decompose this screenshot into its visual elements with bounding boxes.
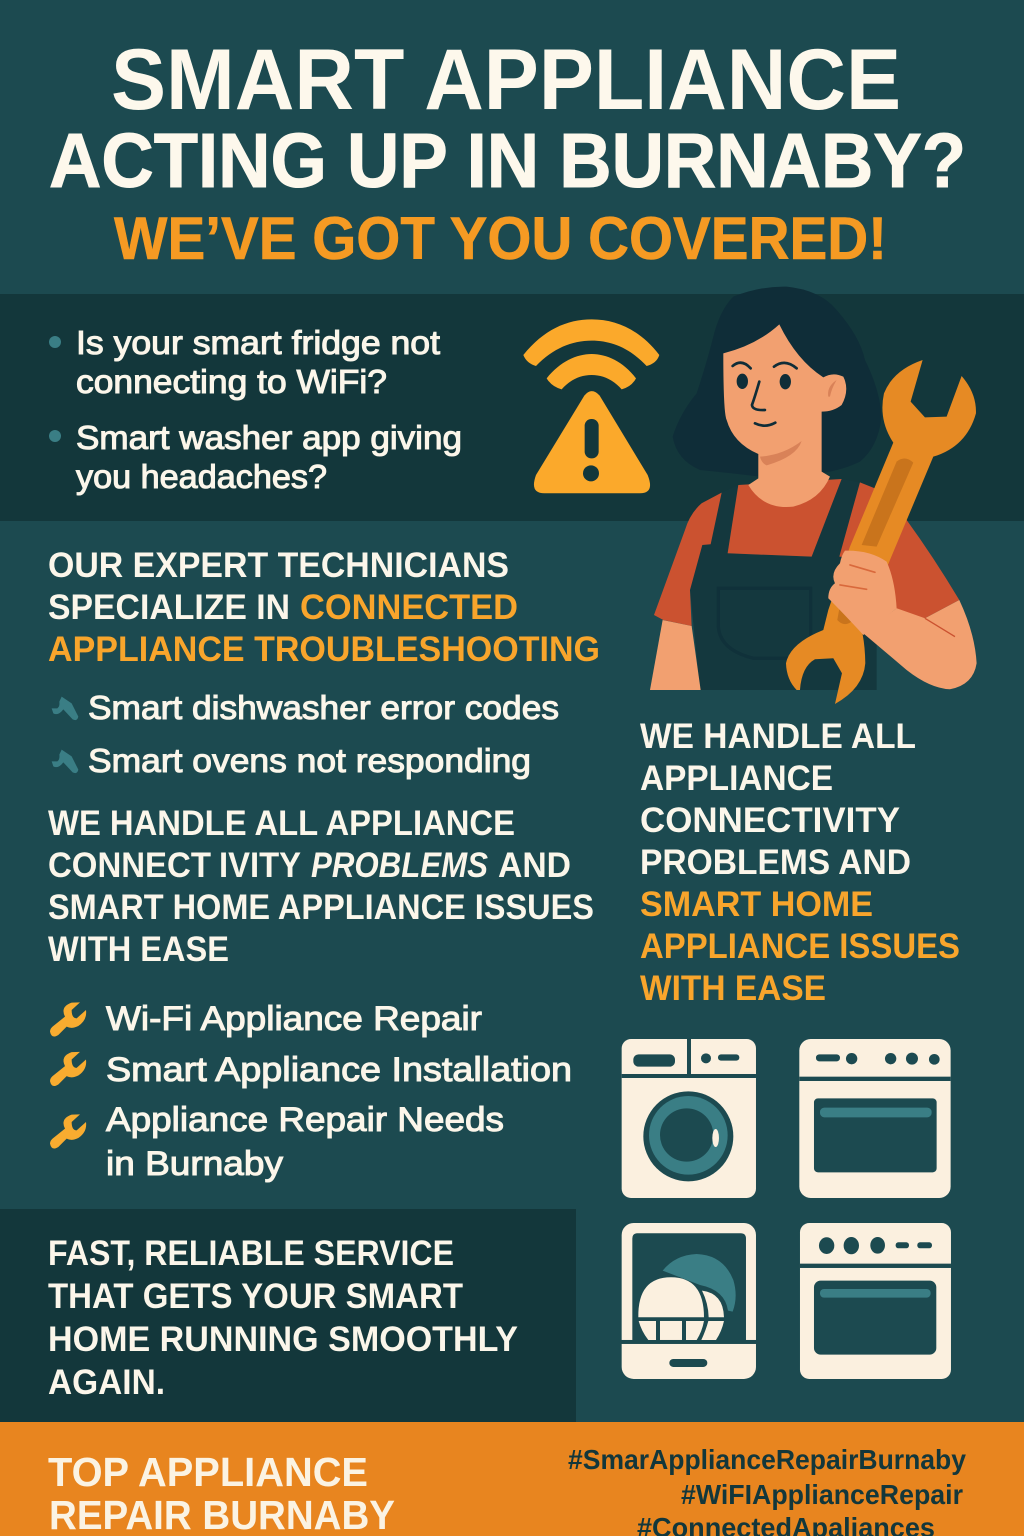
hashtags: #WiFIApplianceRepair <box>681 1479 963 1510</box>
icon: yellow wrench <box>50 1052 86 1086</box>
text block: connectivity problems <box>48 804 594 969</box>
title: SMART APPLIANCE <box>111 32 901 128</box>
icon: dishwasher <box>621 1223 757 1379</box>
text block: right column: SMART HOME <box>640 885 873 924</box>
left arm <box>650 620 701 690</box>
hair <box>673 287 882 477</box>
list: services: Smart Appliance Installation <box>106 1051 572 1089</box>
text block: connectivity problems: AND <box>498 846 571 885</box>
panel: questions list: Is your smart fridge not <box>76 324 440 361</box>
overalls <box>690 479 877 690</box>
right arm <box>863 600 977 689</box>
footer band <box>0 1422 1024 1536</box>
icon: oven <box>800 1223 951 1379</box>
footer heading <box>48 1449 395 1536</box>
hand <box>828 551 897 635</box>
heading: expert technicians <box>48 546 600 669</box>
icon: washing machine <box>622 1039 756 1198</box>
shirt <box>728 479 842 557</box>
list: smart appliance problems: Smart ovens not responding <box>88 742 531 779</box>
heading: expert technicians: SPECIALIZE IN <box>48 588 290 627</box>
icon: range top-left oven <box>799 1039 951 1198</box>
list: smart appliance problems: Smart dishwasher error codes <box>88 689 559 726</box>
neck and face <box>723 324 846 507</box>
icon: yellow wrench <box>50 1114 86 1149</box>
footer heading: TOP APPLIANCE <box>48 1449 368 1495</box>
text block: right column: PROBLEMS AND <box>640 843 911 882</box>
panel: fast reliable service: FAST, RELIABLE SERVICE <box>48 1234 454 1273</box>
list: services: Wi-Fi Appliance Repair <box>106 1000 482 1038</box>
panel: questions list: connecting to WiFi? <box>76 363 387 400</box>
title: WE’VE GOT YOU COVERED! <box>114 205 887 272</box>
list: services: in Burnaby <box>106 1145 283 1183</box>
list: services <box>50 1000 572 1183</box>
text block: right column: CONNECTIVITY <box>640 801 900 840</box>
panel: questions list <box>49 324 462 495</box>
text block: connectivity problems: PROBLEMS <box>311 846 488 885</box>
pocket <box>718 588 811 658</box>
heading: expert technicians: OUR EXPERT TECHNICIANS <box>48 546 509 585</box>
panel: fast reliable service: HOME RUNNING SMOOTHLY <box>48 1320 518 1359</box>
icon: wifi warning <box>523 319 659 493</box>
text block: right column: WE HANDLE ALL <box>640 717 916 756</box>
panel: fast reliable service: THAT GETS YOUR SMART <box>48 1277 463 1316</box>
icon: teal wrench <box>52 750 78 773</box>
panel: fast reliable service: AGAIN. <box>48 1363 165 1402</box>
text block: connectivity problems: IVITY <box>219 846 301 885</box>
heading: expert technicians: CONNECTED <box>300 588 518 627</box>
list: smart appliance problems <box>52 689 559 779</box>
panel: dark question band <box>0 294 1024 521</box>
heading: expert technicians: APPLIANCE TROUBLESHOOTING <box>48 630 600 669</box>
wrench <box>786 360 976 704</box>
icon: teal wrench <box>52 697 78 720</box>
hashtags <box>568 1444 966 1536</box>
panel: questions list: Smart washer app giving <box>76 419 462 456</box>
text block: right column: APPLIANCE ISSUES <box>640 927 960 966</box>
title <box>49 32 966 272</box>
list: services: Appliance Repair Needs <box>106 1101 504 1139</box>
text block: connectivity problems: WE HANDLE ALL APPLIANCE <box>48 804 515 843</box>
text block: right column: APPLIANCE <box>640 759 833 798</box>
text block: connectivity problems: WITH EASE <box>48 930 229 969</box>
panel: fast reliable service <box>0 1209 576 1422</box>
panel: questions list: you headaches? <box>76 458 327 495</box>
text block: right column <box>640 717 960 1008</box>
title: ACTING UP IN BURNABY? <box>49 118 966 204</box>
text block: connectivity problems: SMART HOME APPLIANCE ISSUES <box>48 888 594 927</box>
illustration: technician with wrench <box>650 287 977 704</box>
text block: right column: WITH EASE <box>640 969 826 1008</box>
face features <box>733 363 797 426</box>
hashtags: #SmarApplianceRepairBurnaby <box>568 1444 966 1475</box>
icon: yellow wrench <box>50 1002 86 1037</box>
text block: connectivity problems: CONNECT <box>48 846 211 885</box>
